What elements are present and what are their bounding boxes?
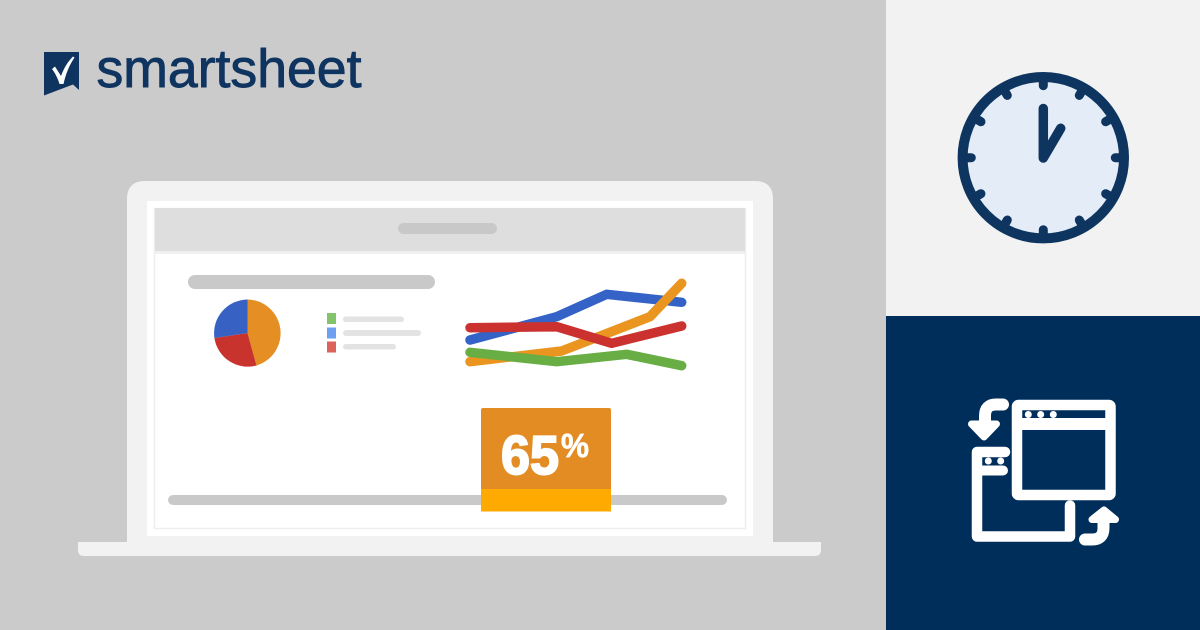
window header bar [155, 208, 745, 254]
progress callout: 65% [481, 408, 611, 512]
large window [1017, 405, 1110, 495]
icon: clock [963, 77, 1124, 238]
arrow: bottom right [1085, 510, 1116, 540]
laptop illustration [78, 181, 821, 556]
pie chart [214, 300, 281, 367]
icon: swapping windows [972, 404, 1116, 540]
laptop screen [147, 201, 753, 536]
arrow: top left [972, 404, 1003, 437]
laptop base [78, 542, 821, 556]
progress callout: 65%: % [561, 427, 589, 464]
small window [977, 452, 1070, 536]
progress bar track [168, 495, 727, 505]
logo wordmark: smartsheet [96, 39, 362, 99]
line chart [470, 283, 682, 366]
panel: clock [886, 0, 1200, 316]
report title placeholder [188, 275, 435, 289]
laptop body [127, 181, 773, 545]
icon: smartsheet flag [44, 52, 79, 96]
logo: smartsheet [44, 39, 362, 99]
progress callout: 65%: 65 [501, 424, 559, 486]
chart legend [327, 313, 421, 352]
panel: windows [886, 316, 1200, 630]
